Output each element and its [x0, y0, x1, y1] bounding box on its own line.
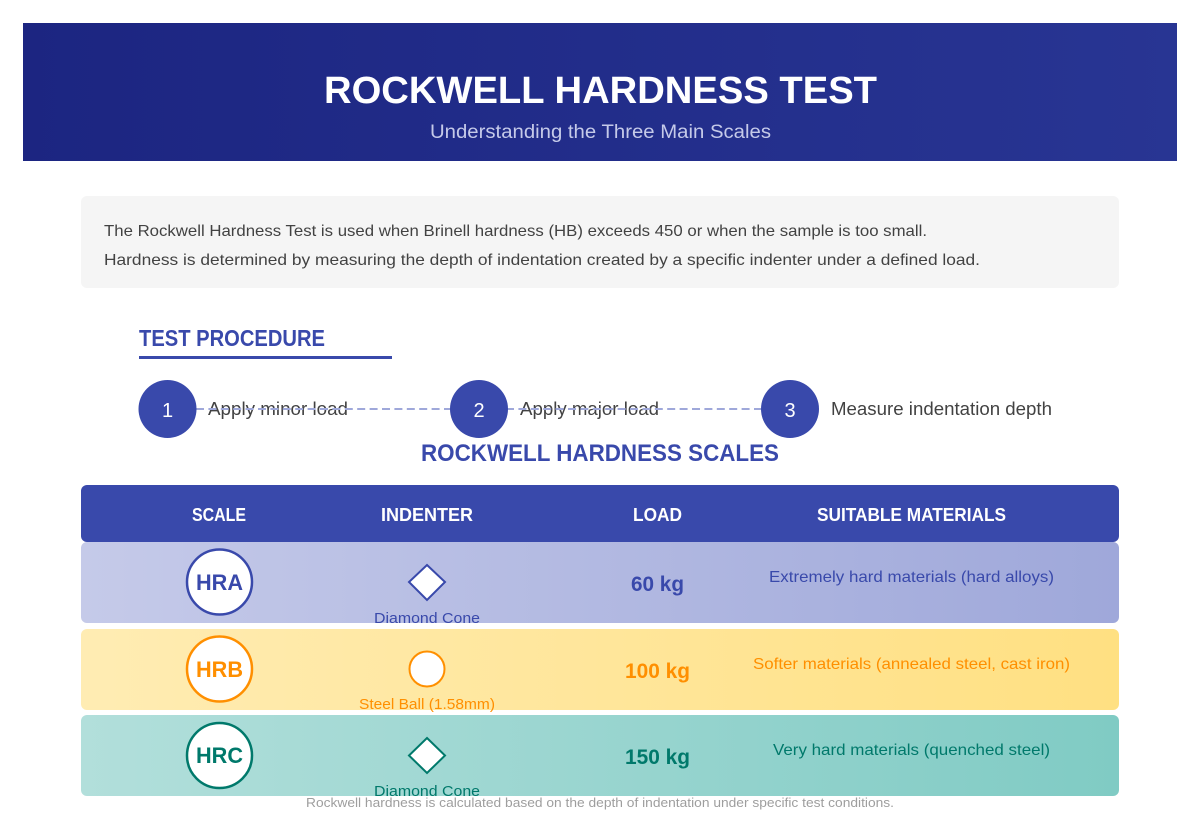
indenter label: Steel Ball (1.58mm)	[359, 696, 495, 713]
panel: introduction	[81, 196, 1119, 288]
header banner	[23, 23, 1177, 161]
table header: INDENTER	[381, 505, 473, 525]
row: HRB	[81, 629, 1119, 713]
HRC badge	[187, 723, 252, 788]
heading: test procedure	[139, 325, 392, 359]
row: HRA	[81, 542, 1119, 627]
indenter label: Diamond Cone	[374, 783, 480, 800]
step 3 label: Measure indentation depth	[831, 399, 1052, 419]
intro line 1: The Rockwell Hardness Test is used when Brinell hardness (HB) exceeds 450 or when the sample is too small.	[104, 223, 927, 240]
HRB badge: HRB	[196, 657, 243, 682]
title: ROCKWELL HARDNESS TEST	[324, 70, 877, 112]
step 2 label: Apply major load	[520, 399, 659, 419]
materials: Very hard materials (quenched steel)	[773, 742, 1050, 759]
table header	[81, 485, 1119, 542]
table header: LOAD	[633, 505, 682, 525]
step 2 badge	[450, 380, 508, 438]
load value: 100 kg	[625, 660, 690, 683]
load value: 60 kg	[631, 573, 684, 596]
materials: Softer materials (annealed steel, cast iron)	[753, 656, 1070, 673]
load value: 150 kg	[625, 746, 690, 769]
subtitle: Understanding the Three Main Scales	[430, 122, 771, 143]
process steps	[138, 380, 1052, 438]
row: HRC	[81, 715, 1119, 800]
step 2 badge: 2	[473, 400, 485, 422]
dashed connector	[196, 408, 761, 410]
HRA badge: HRA	[196, 570, 243, 595]
heading: test procedure: TEST PROCEDURE	[139, 325, 325, 351]
table header: SCALE	[192, 505, 246, 525]
step 1 label: Apply minor load	[208, 399, 348, 419]
icon: diamond cone	[409, 738, 445, 773]
HRA badge	[187, 550, 252, 614]
table header: SUITABLE MATERIALS	[817, 505, 1006, 525]
step 3 badge: 3	[784, 400, 796, 422]
step 3 badge	[761, 380, 819, 438]
indenter label: Diamond Cone	[374, 610, 480, 627]
HRB badge	[187, 636, 252, 702]
step 1 badge: 1	[162, 400, 173, 422]
materials: Extremely hard materials (hard alloys)	[769, 569, 1054, 586]
icon: diamond cone	[409, 565, 445, 600]
intro line 2: Hardness is determined by measuring the depth of indentation created by a specific indenter under a defined load.	[104, 252, 980, 269]
HRC badge: HRC	[196, 743, 243, 768]
heading: hardness scales: ROCKWELL HARDNESS SCALES	[421, 440, 779, 467]
icon: steel ball	[410, 652, 444, 686]
step 1 badge	[138, 380, 196, 438]
footnote: Rockwell hardness is calculated based on the depth of indentation under specific test conditions.	[306, 795, 894, 810]
